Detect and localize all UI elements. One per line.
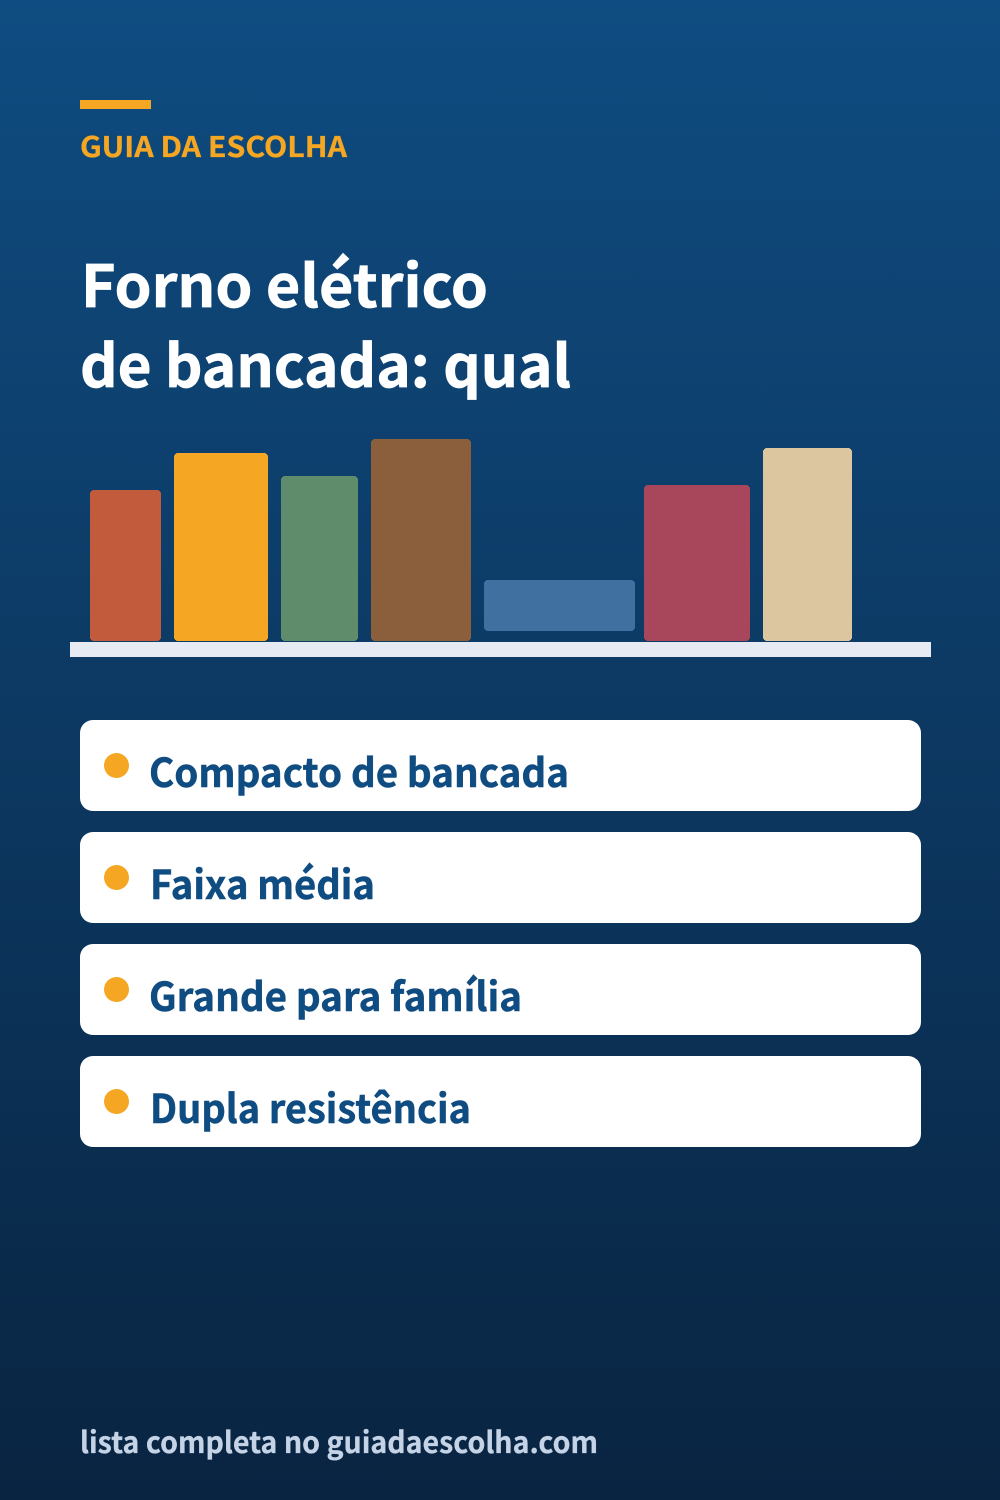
bar: terracotta <box>90 490 161 641</box>
bar: brown <box>371 439 471 641</box>
option card: Dupla resistência <box>80 1056 921 1147</box>
bookshelf-style oven bars <box>70 439 931 657</box>
bar: blue <box>484 580 635 631</box>
option card: Compacto de bancada: Compacto de bancada <box>149 742 569 799</box>
bar: crimson <box>644 485 750 641</box>
eyebrow label: GUIA DA ESCOLHA <box>80 125 348 166</box>
title <box>80 240 571 404</box>
bar: orange <box>174 453 268 641</box>
bar: green <box>281 476 358 641</box>
title: Forno elétrico <box>81 240 488 324</box>
accent bar <box>80 100 151 109</box>
option card: Compacto de bancada <box>80 720 921 811</box>
option card: Faixa média <box>80 832 921 923</box>
option card: Faixa média: Faixa média <box>150 854 375 911</box>
option card: Dupla resistência: Dupla resistência <box>150 1078 471 1135</box>
title: de bancada: qual <box>80 320 571 404</box>
option card: Grande para família <box>80 944 921 1035</box>
option card: Grande para família: Grande para família <box>149 966 522 1023</box>
bar: beige <box>763 448 852 641</box>
shelf <box>70 642 931 657</box>
footer link text: lista completa no guiadaescolha.com <box>80 1420 598 1462</box>
